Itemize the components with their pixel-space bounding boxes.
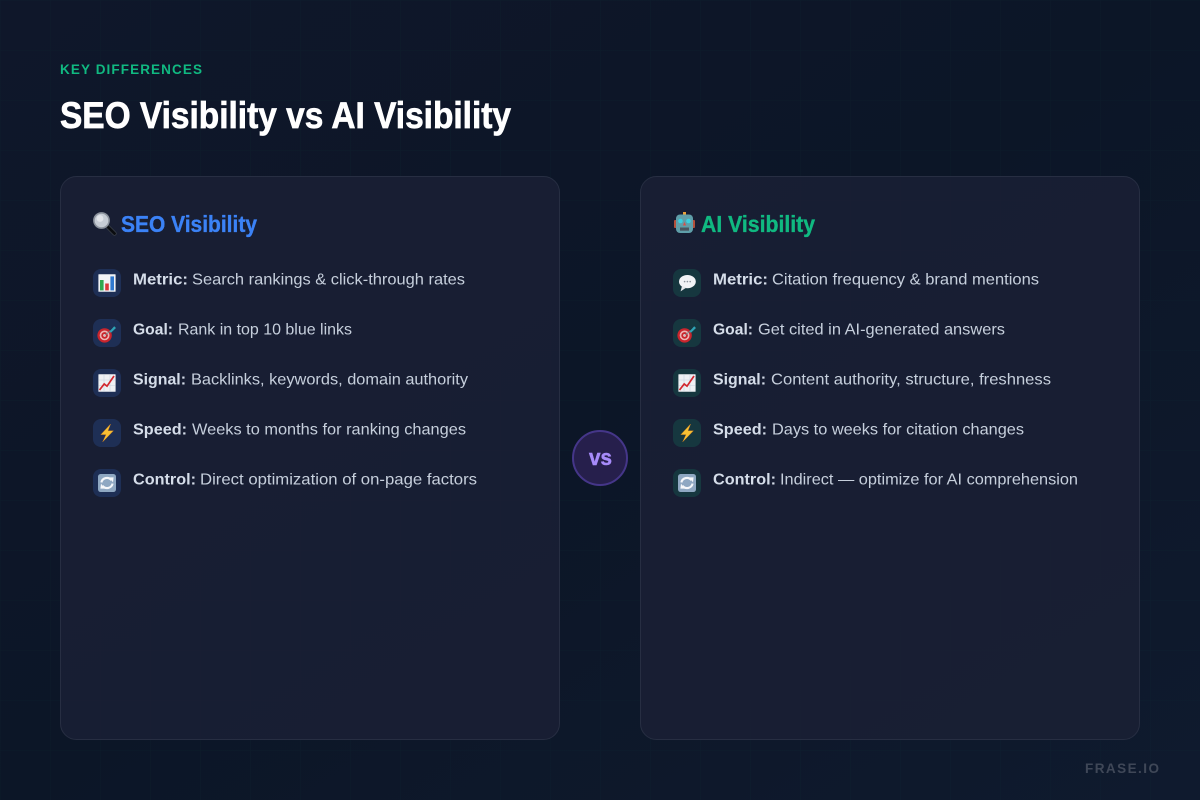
eyebrow: key differences: KEY DIFFERENCES xyxy=(60,62,202,77)
row: goal: Goal: xyxy=(713,322,753,339)
vs badge xyxy=(573,431,627,485)
row: goal xyxy=(93,319,352,347)
row: metric xyxy=(93,269,465,297)
row: signal: Content authority, structure, freshness xyxy=(771,372,1051,389)
row: goal xyxy=(673,319,1005,347)
row: control xyxy=(673,469,1078,497)
row: signal xyxy=(93,369,468,397)
row: control: Indirect — optimize for AI comprehension xyxy=(780,472,1078,489)
row: control: Control: xyxy=(713,472,776,489)
row: goal: Goal: xyxy=(133,322,173,339)
panel heading: AI visibility: AI Visibility xyxy=(701,211,815,237)
row: metric: Citation frequency & brand mentions xyxy=(772,272,1039,289)
row: signal: Signal: xyxy=(133,372,186,389)
row: goal: Rank in top 10 blue links xyxy=(178,322,352,339)
vs badge: vs xyxy=(589,445,612,470)
footer brand: FRASE.IO xyxy=(1085,761,1159,776)
panel: AI visibility xyxy=(640,176,1140,740)
icon: magnifying glass xyxy=(94,213,114,234)
row: speed: Days to weeks for citation changes xyxy=(772,422,1024,439)
row: speed xyxy=(673,419,1024,447)
panel heading: SEO visibility: SEO Visibility xyxy=(121,211,257,237)
title: SEO Visibility vs AI Visibility xyxy=(60,95,511,136)
row: control xyxy=(93,469,477,497)
row: metric xyxy=(673,269,1039,297)
row: goal: Get cited in AI-generated answers xyxy=(758,322,1005,339)
row: metric: Search rankings & click-through rates xyxy=(192,272,465,289)
row: speed: Speed: xyxy=(713,422,767,439)
row: control: Control: xyxy=(133,472,196,489)
row: metric: Metric: xyxy=(133,272,188,289)
row: speed: Weeks to months for ranking changes xyxy=(192,422,466,439)
icon: robot xyxy=(674,212,695,233)
row: signal xyxy=(673,369,1051,397)
row: speed xyxy=(93,419,466,447)
row: signal: Backlinks, keywords, domain authority xyxy=(191,372,468,389)
row: control: Direct optimization of on-page factors xyxy=(200,472,477,489)
panel: SEO visibility xyxy=(60,176,560,740)
row: metric: Metric: xyxy=(713,272,768,289)
row: signal: Signal: xyxy=(713,372,766,389)
row: speed: Speed: xyxy=(133,422,187,439)
